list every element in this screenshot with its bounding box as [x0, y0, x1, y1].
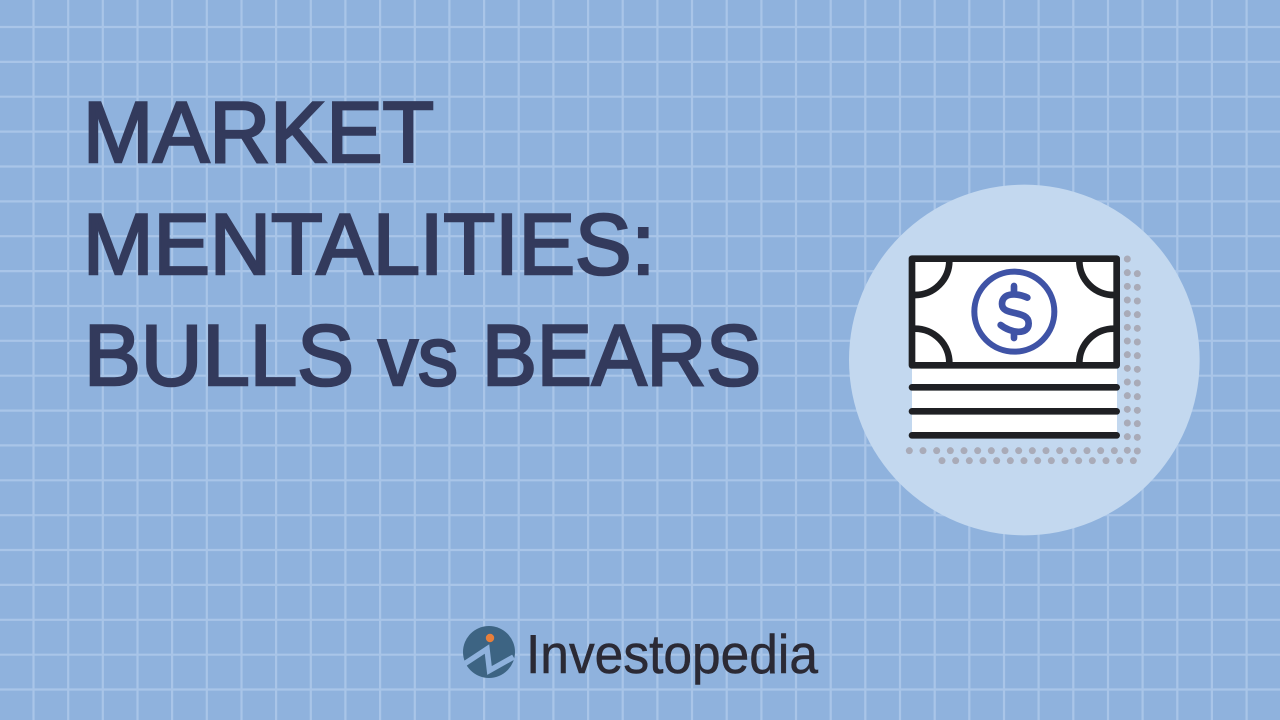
title line: BULLS vs BEARS: vs: [378, 309, 458, 403]
title: [83, 85, 761, 404]
title line: BULLS vs BEARS: BULLS: [84, 308, 354, 404]
title line: MENTALITIES:: MENTALITIES:: [83, 197, 655, 293]
icon: Investopedia mark: [463, 626, 515, 678]
title line: BULLS vs BEARS: BEARS: [482, 308, 761, 404]
top banknote: [912, 259, 1117, 365]
title line: BULLS vs BEARS: [84, 308, 761, 404]
light circle backdrop: [849, 185, 1200, 535]
bill stack: [912, 367, 1117, 435]
title line: MARKET: MARKET: [83, 85, 434, 181]
logo: Investopedia: [463, 623, 818, 685]
wordmark: Investopedia: [526, 623, 818, 685]
illustration: stack of banknotes in circle: [849, 185, 1200, 535]
icon: dollar sign in circle: [974, 272, 1054, 352]
dotted shadow: [906, 255, 1141, 464]
